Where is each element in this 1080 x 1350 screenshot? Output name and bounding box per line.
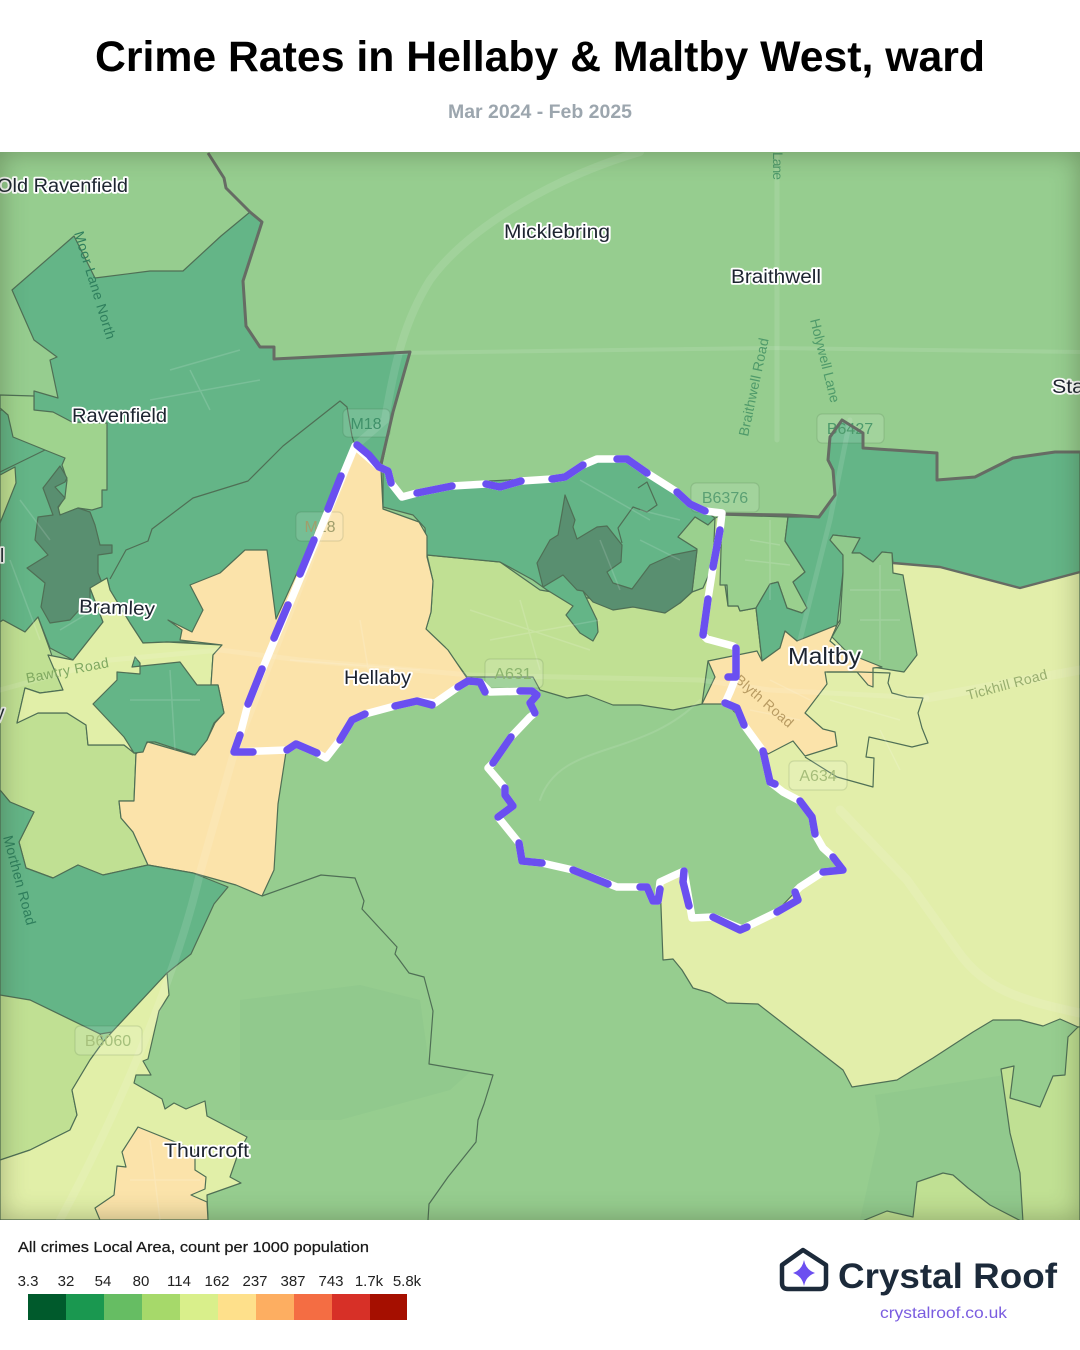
legend scale labels: 237 [242,1273,268,1290]
road shield: M18 north [343,409,390,437]
area: large green, Ravenfield and west [0,212,410,660]
legend scale labels: 5.8k [393,1273,422,1290]
lines: western ward edges [110,401,355,579]
legend scale labels: 32 [58,1273,74,1290]
area: central green north of Hellaby [383,457,715,641]
subtitle: date range: Mar 2024 - Feb 2025 [448,102,632,123]
place label: Bramley: Bramley [79,597,156,620]
area: light green, east Maltby [830,535,917,672]
area: lime, south-west [0,995,103,1160]
road label: Tickhill Road: Tickhill Road [965,666,1049,703]
ward outline: white casing [234,446,843,929]
area: pale, Bramley south [17,578,222,753]
area: lighter green, Ravenfield village [0,395,107,515]
legend scale labels: 1.7k [355,1273,384,1290]
road label: Lane: Lane [770,152,786,180]
area: green patch, west of Hellaby [93,657,224,755]
legend scale labels: 3.3 [18,1273,38,1290]
place label: cut-off l: l [0,546,4,567]
map edge vignette [0,152,1080,1220]
place label: Hellaby: Hellaby [344,668,412,689]
area: darkest green, central [537,495,697,613]
road shield: M18 south: M18 [304,519,336,536]
area: lime, between Hellaby and Maltby [426,515,762,710]
panel: choropleth map [0,152,1080,1222]
area: darkest green, Bramley [27,466,112,623]
road label: Moor Lane North: Moor Lane North [71,229,119,341]
base area: low crime green [0,152,1080,1220]
road label: Holywell Lane: Holywell Lane [807,317,843,404]
legend colour bar [28,1294,407,1320]
area: pale, Thurcroft [0,973,247,1220]
area: lime patch, far west [0,467,16,523]
area: green, north-east [756,420,1080,661]
place label: Sta (cut off): Sta [1052,377,1080,398]
road shield: A634 [789,761,847,790]
place label: Ravenfield: Ravenfield [72,406,167,427]
area: lighter green north of Maltby [720,515,807,613]
area: Thurcroft tan [95,1127,208,1220]
place label: Old Ravenfield: Old Ravenfield [0,176,128,197]
road shield: M18 north: M18 [350,416,382,433]
legend scale labels: 54 [95,1273,111,1290]
road shield: B6060 [75,1026,142,1055]
road shield: B6427 [817,414,884,443]
title: Crime Rates in Hellaby & Maltby West, ward [95,33,985,81]
thick boundary: north-east authority edge [722,420,1080,517]
place label: Thurcroft: Thurcroft [164,1141,250,1162]
road label: Blyth Road: Blyth Road [732,671,797,731]
legend scale labels: 114 [167,1273,191,1290]
road shield: A631 [485,659,543,688]
area: lime, south edge [860,1173,1023,1222]
place label: Micklebring: Micklebring [504,222,610,243]
road label: Bawtry Road: Bawtry Road [25,654,110,686]
ward outline: purple dashes [234,445,843,930]
legend title: All crimes Local Area, count per 1000 population [18,1239,369,1256]
area: Hellaby tan [119,446,469,896]
area: lime, south-east corner [1001,1027,1080,1222]
area: light patch by ward edge [678,517,715,592]
road label: Braithwell Road: Braithwell Road [735,336,772,438]
legend scale labels: 80 [133,1273,149,1290]
line: central estate [618,482,657,543]
logo wordmark: Crystal Roof [838,1257,1057,1296]
road shield: B6376 [691,483,759,512]
road shield: B6060: B6060 [85,1033,131,1050]
legend scale labels: 743 [318,1273,344,1290]
road shield: B6376: B6376 [702,490,748,507]
road label: Morthen Road: Morthen Road [0,834,39,927]
road shield: M18 south [296,512,343,541]
area: lime, west [0,617,148,878]
thick boundary: east edge [893,563,1080,588]
area: south-east pale band [660,563,1080,1087]
ward boundary: Hellaby and Maltby West [234,445,843,930]
legend scale labels: 162 [204,1273,230,1290]
place label: Maltby: Maltby [788,643,862,669]
road shield: A634: A634 [799,768,837,785]
icon: Crystal Roof house logo [782,1250,826,1289]
legend scale labels: 387 [280,1273,306,1290]
area: slightly deeper woodland tone, south-east [860,1075,1023,1220]
roads: faint network [0,152,1080,1220]
road shield: B6427: B6427 [827,421,873,438]
road shield: A631: A631 [494,666,532,683]
area: green, Morthen [0,790,228,1034]
place label: Braithwell: Braithwell [731,267,821,288]
thick boundary: local authority edge [208,153,410,464]
line: southern ward boundary [262,875,493,1220]
legend scale labels [18,1273,422,1290]
website link text: crystalroof.co.uk [880,1305,1008,1322]
line: Maltby south estates [805,672,928,787]
area: Maltby tan [702,625,882,756]
area: slightly deeper woodland tone, south [240,985,470,1120]
